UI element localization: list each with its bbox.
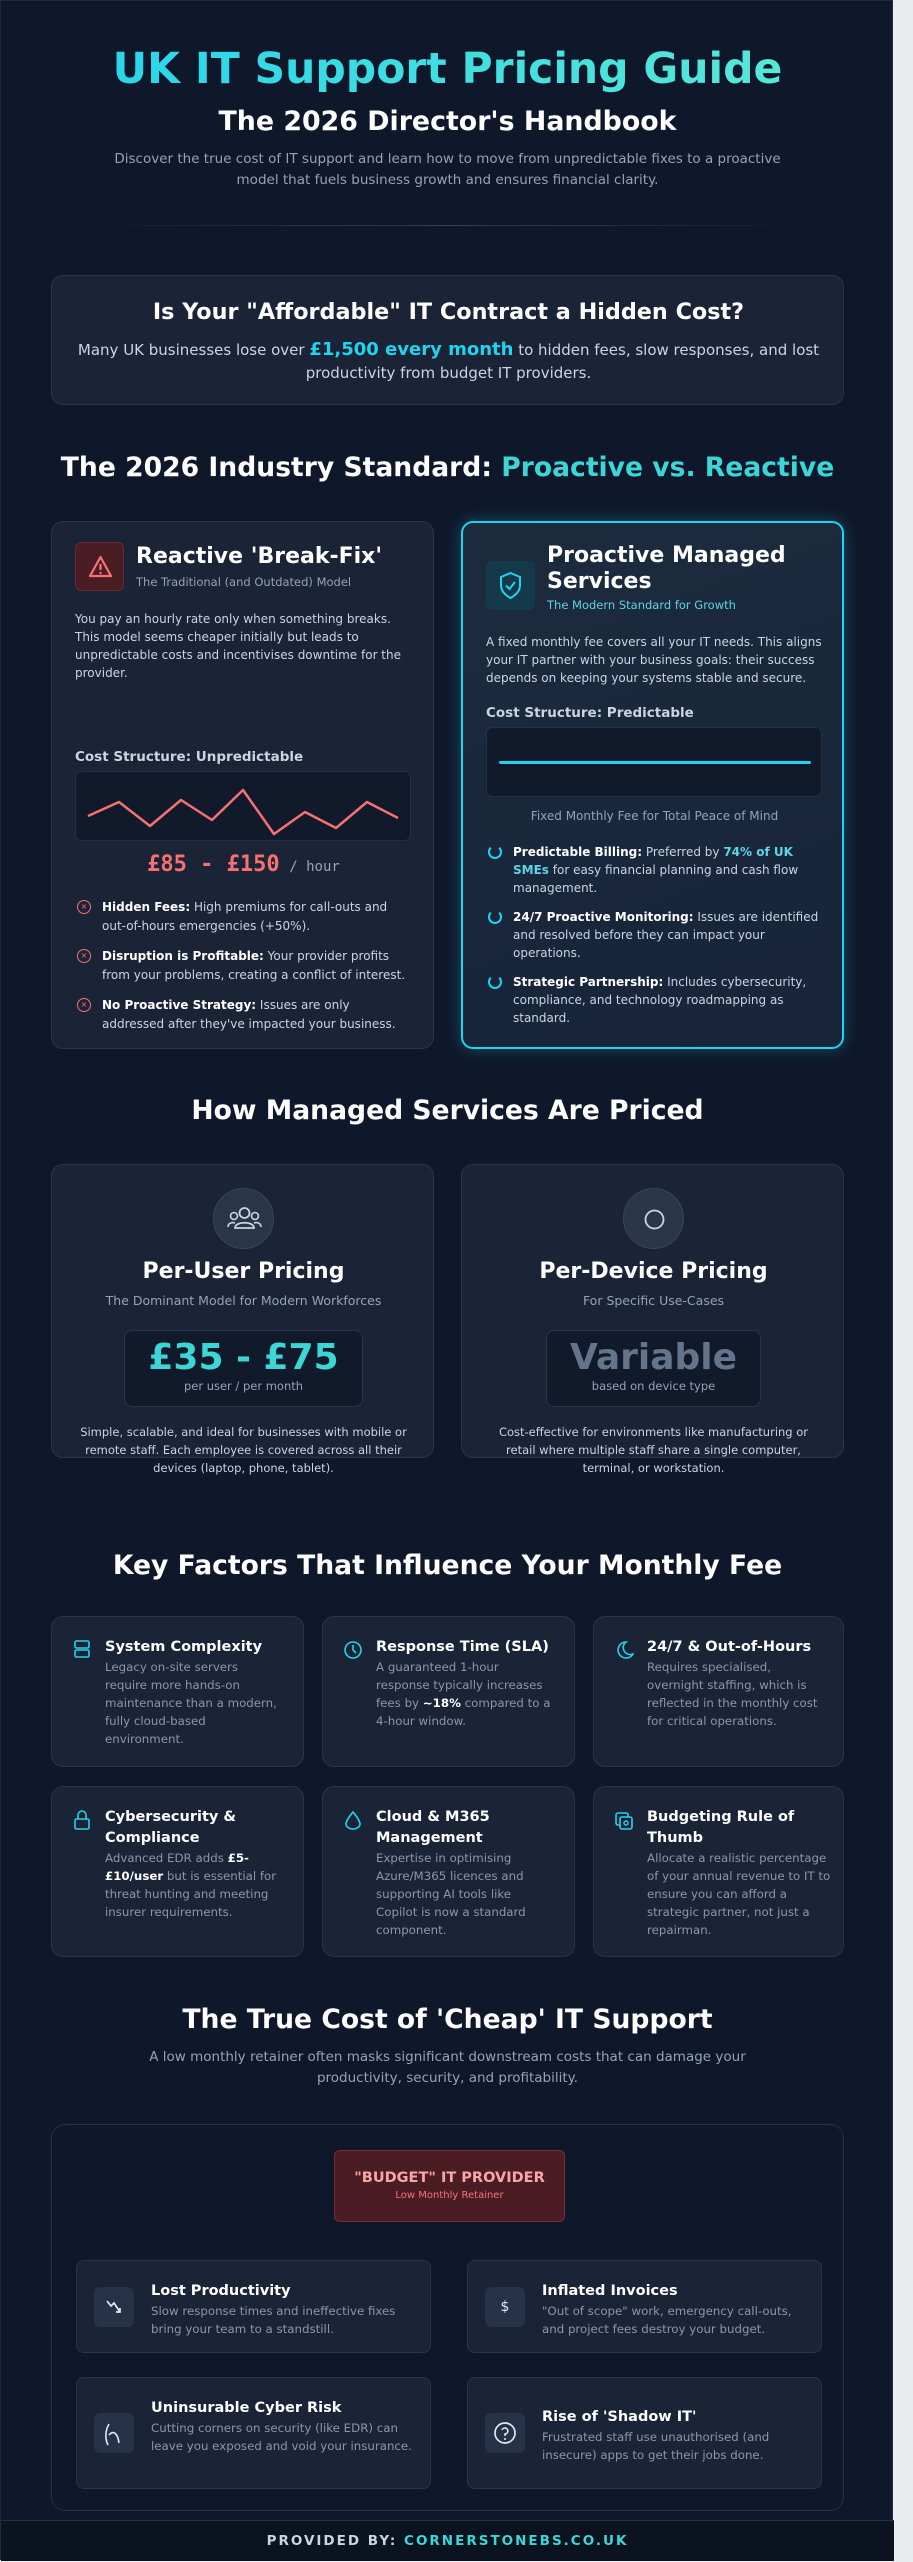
item: inflated invoices: Inflated Invoices: [542, 2283, 678, 2299]
item: inflated invoices: "Out of scope" work, emergency call-outs, and project fees destroy your budget.: [542, 2304, 792, 2336]
callout: budget provider: [334, 2150, 565, 2222]
list: drawbacks: [77, 900, 405, 1031]
callout: budget provider: "BUDGET" IT PROVIDER: [354, 2170, 545, 2186]
chart: volatile cost: [75, 771, 411, 841]
factor: cybersecurity: Advanced EDR adds £5-£10/user but is essential for threat hunting and meeting insurer requirements.: [105, 1851, 276, 1919]
panel: per-user: [51, 1164, 434, 1458]
callout: hidden cost: Many UK businesses lose over £1,500 every month to hidden fees, slow responses, and lost productivity from budget IT providers.: [78, 339, 819, 382]
factor: out of hours: Requires specialised, overnight staffing, which is reflected in the monthly cost for critical operations.: [647, 1660, 818, 1728]
callout: hidden cost: [51, 275, 844, 405]
panel: per-device: Per-Device Pricing: [539, 1259, 768, 1284]
price: per user: £35 - £75: [148, 1337, 339, 1378]
list: drawbacks: ×: [81, 1000, 87, 1009]
intro text: Discover the true cost of IT support and learn how to move from unpredictable fixes to a proactive model that fuels business growth and ensures financial clarity.: [114, 151, 781, 188]
icon: shield: [486, 561, 535, 610]
heading: pricing models: How Managed Services Are Priced: [191, 1095, 704, 1126]
chart: flat cost: [486, 727, 822, 797]
text: You pay an hourly rate only when something breaks. This model seems cheaper initially but leads to unpredictable costs and incentivises downtime for the provider.: [75, 612, 401, 680]
factor: cybersecurity: [51, 1786, 304, 1957]
panel: per-user: Simple, scalable, and ideal for businesses with mobile or remote staff. Each employee is covered across all their devices (laptop, phone, tablet).: [80, 1425, 407, 1475]
list: drawbacks: ×: [81, 902, 87, 911]
item: cyber risk: Uninsurable Cyber Risk: [151, 2400, 341, 2416]
item: inflated invoices: $: [501, 2299, 509, 2315]
heading: Proactive Managed Services: [547, 543, 786, 594]
price: variable: based on device type: [592, 1379, 715, 1393]
callout: hidden cost: Is Your "Affordable" IT Contract a Hidden Cost?: [153, 299, 744, 325]
price: per user: [124, 1330, 363, 1407]
item: lost productivity: [76, 2260, 431, 2353]
footer: PROVIDED BY: CORNERSTONEBS.CO.UK: [267, 2533, 628, 2549]
list: benefits: Strategic Partnership: Includes cybersecurity, compliance, and technology roadmapping as standard.: [513, 975, 806, 1025]
icon: device: [623, 1188, 684, 1249]
factor: cloud: [322, 1786, 575, 1957]
factor: budgeting: Allocate a realistic percentage of your annual revenue to IT to ensure you can afford a strategic partner, not just a repairman.: [647, 1851, 830, 1937]
panel: proactive: A fixed monthly fee covers all your IT needs. This aligns your IT partner with your business goals: their success depends on keeping your systems stable and secure.: [486, 635, 822, 685]
panel: proactive: Fixed Monthly Fee for Total Peace of Mind: [531, 809, 778, 823]
item: shadow IT: [467, 2377, 822, 2489]
list: drawbacks: No Proactive Strategy: Issues are only addressed after they've impacted your business.: [102, 998, 396, 1031]
title: UK IT Support Pricing Guide: [113, 45, 782, 94]
panel: proactive: The Modern Standard for Growth: [547, 598, 736, 612]
item: shadow IT: Rise of 'Shadow IT': [542, 2409, 696, 2425]
panel: hidden costs: [51, 2124, 844, 2511]
list: benefits: Predictable Billing: Preferred by 74% of UK SMEs for easy financial planning and cash flow management.: [513, 845, 798, 895]
factor: response time: [322, 1616, 575, 1767]
callout: budget provider: Low Monthly Retainer: [395, 2190, 504, 2201]
factor: cybersecurity: Cybersecurity & Compliance: [105, 1809, 236, 1846]
factor: system complexity: Legacy on-site servers require more hands-on maintenance than a modern, fully cloud-based environment.: [105, 1660, 277, 1746]
panel: reactive: [51, 521, 434, 1049]
panel: per-device: For Specific Use-Cases: [583, 1293, 724, 1308]
price: variable: [546, 1330, 761, 1407]
heading: industry standard: The 2026 Industry Standard: Proactive vs. Reactive: [61, 452, 834, 483]
item: lost productivity: Lost Productivity: [151, 2283, 291, 2299]
panel: per-device: Cost-effective for environments like manufacturing or retail where multiple staff share a single computer, terminal, or workstation.: [499, 1425, 808, 1475]
factor: out of hours: 24/7 & Out-of-Hours: [647, 1639, 811, 1655]
heading: true cost: The True Cost of 'Cheap' IT Support: [182, 2004, 713, 2035]
heading: Reactive 'Break-Fix': [136, 544, 382, 569]
panel: reactive: Cost Structure: Unpredictable: [75, 749, 303, 765]
price: variable: Variable: [570, 1337, 737, 1378]
factor: budgeting: Budgeting Rule of Thumb: [647, 1809, 794, 1846]
panel: per-user: Per-User Pricing: [143, 1259, 344, 1284]
text: true cost intro: A low monthly retainer often masks significant downstream costs that can damage your productivity, security, and profitability.: [149, 2049, 746, 2086]
factor: response time: Response Time (SLA): [376, 1639, 549, 1655]
panel: per-user: The Dominant Model for Modern Workforces: [106, 1293, 381, 1308]
list: drawbacks: Hidden Fees: High premiums for call-outs and out-of-hours emergencies (+50%).: [102, 900, 387, 933]
heading: key factors: Key Factors That Influence Your Monthly Fee: [113, 1550, 782, 1581]
item: inflated invoices: [467, 2260, 822, 2353]
factor: budgeting: [593, 1786, 844, 1957]
item: cyber risk: [76, 2377, 431, 2489]
factor: cloud: Expertise in optimising Azure/M365 licences and supporting AI tools like Copilot is now a standard component.: [376, 1851, 526, 1937]
icon: warning: [75, 542, 124, 591]
list: drawbacks: Disruption is Profitable: Your provider profits from your problems, creating a conflict of interest.: [102, 949, 405, 982]
factor: system complexity: System Complexity: [105, 1639, 262, 1655]
subtitle: The 2026 Director's Handbook: [218, 106, 676, 137]
footer: [1, 2520, 894, 2561]
list: drawbacks: ×: [81, 951, 87, 960]
list: benefits: 24/7 Proactive Monitoring: Issues are identified and resolved before they can impact your operations.: [513, 910, 818, 960]
panel: proactive: Cost Structure: Predictable: [486, 705, 694, 721]
factor: response time: A guaranteed 1-hour response typically increases fees by ~18% compared to a 4-hour window.: [376, 1660, 550, 1728]
icon: users: [213, 1188, 274, 1249]
factor: cloud: Cloud & M365 Management: [376, 1809, 490, 1846]
list: benefits: [488, 845, 818, 1025]
panel: reactive: The Traditional (and Outdated) Model: [136, 575, 351, 589]
panel: proactive: [461, 521, 844, 1049]
item: shadow IT: Frustrated staff use unauthorised (and insecure) apps to get their jobs done.: [542, 2430, 769, 2462]
item: lost productivity: Slow response times and ineffective fixes bring your team to a standstill.: [151, 2304, 395, 2336]
price: per user: per user / per month: [184, 1379, 303, 1393]
price: £85 - £150 / hour: [147, 852, 340, 877]
item: cyber risk: Cutting corners on security (like EDR) can leave you exposed and void your insurance.: [151, 2421, 412, 2453]
factor: out of hours: [593, 1616, 844, 1767]
panel: per-device: [461, 1164, 844, 1458]
factor: system complexity: [51, 1616, 304, 1767]
